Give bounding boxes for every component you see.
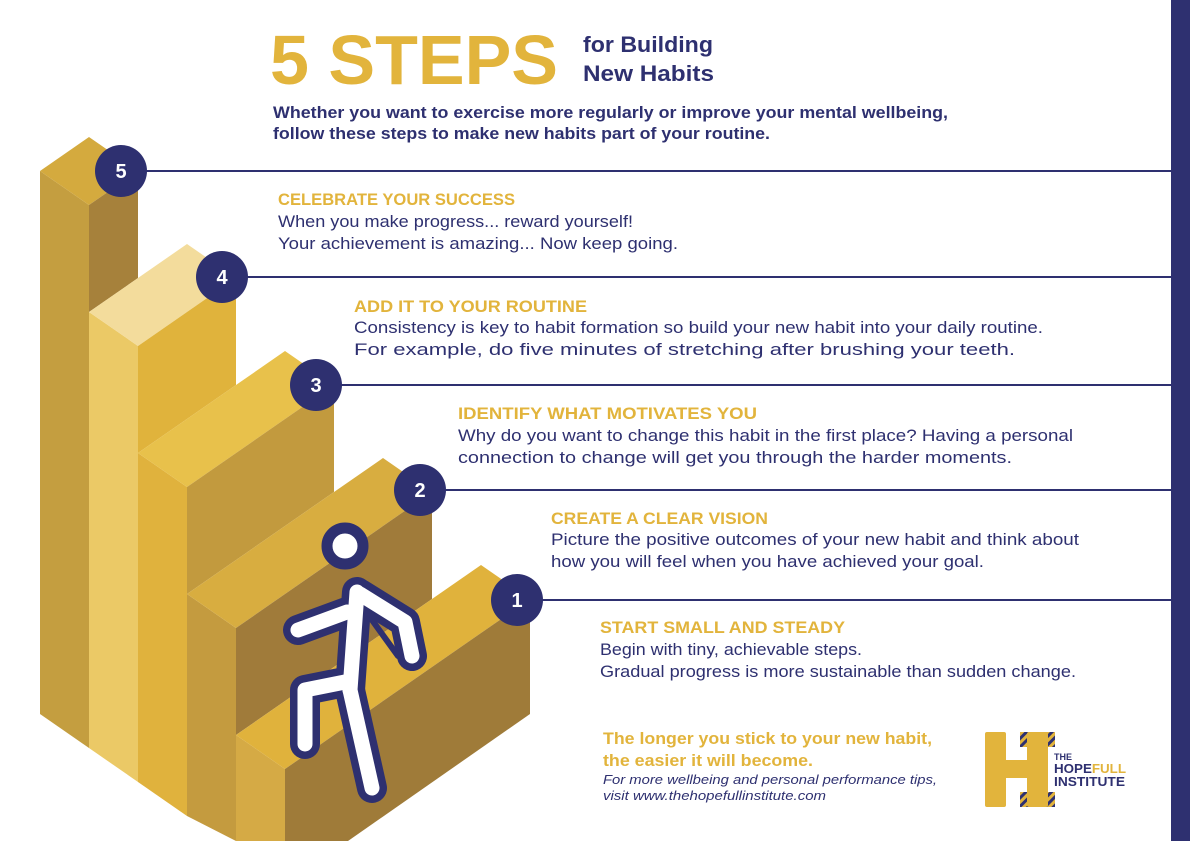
- footer note: The longer you stick to your new habit,: [603, 729, 932, 748]
- step 5 text: [278, 190, 678, 253]
- step 1 text: Begin with tiny, achievable steps.: [600, 640, 862, 659]
- step 1 text: START SMALL AND STEADY: [600, 618, 846, 637]
- step 2 column: [187, 458, 432, 841]
- footer note: visit www.thehopefullinstitute.com: [603, 788, 826, 803]
- step number circles: 1: [511, 590, 523, 612]
- step 2 text: Picture the positive outcomes of your new habit and think about: [551, 530, 1079, 549]
- icon: person climbing: [298, 528, 412, 788]
- step 4 text: [354, 297, 1043, 359]
- connector lines: [121, 171, 1171, 600]
- staircase illustration: [40, 137, 530, 841]
- step 5 column: [40, 137, 138, 748]
- step 1 text: Gradual progress is more sustainable than sudden change.: [600, 662, 1076, 681]
- step 2 text: [551, 509, 1079, 571]
- subtitle: follow these steps to make new habits part of your routine.: [273, 125, 770, 143]
- step 4 text: Consistency is key to habit formation so build your new habit into your daily routine.: [354, 318, 1043, 337]
- subtitle: [273, 104, 948, 143]
- step 5 text: When you make progress... reward yourself!: [278, 212, 633, 231]
- step 3 text: [458, 404, 1073, 467]
- title: for Building: [583, 32, 713, 57]
- step 5 text: CELEBRATE YOUR SUCCESS: [278, 190, 515, 209]
- logo: HOPEFULL: [1054, 762, 1126, 776]
- step 3 text: IDENTIFY WHAT MOTIVATES YOU: [458, 404, 757, 423]
- title: New Habits: [583, 61, 714, 86]
- step 1 column: [236, 565, 530, 841]
- right side bar: [1171, 0, 1190, 841]
- title: 5 STEPS: [270, 21, 558, 99]
- step number circles: [95, 145, 543, 626]
- step 3 column: [138, 351, 334, 816]
- logo: THE: [1054, 752, 1072, 762]
- title: [270, 21, 714, 99]
- step 4 column: [89, 244, 236, 782]
- step 3 text: Why do you want to change this habit in the first place? Having a personal: [458, 426, 1073, 445]
- step 3 text: connection to change will get you through the harder moments.: [458, 448, 1012, 467]
- step 4 text: ADD IT TO YOUR ROUTINE: [354, 297, 587, 316]
- step 2 text: CREATE A CLEAR VISION: [551, 509, 768, 528]
- step 4 text: For example, do five minutes of stretching after brushing your teeth.: [354, 340, 1015, 359]
- step 1 text: [600, 618, 1076, 681]
- logo: INSTITUTE: [1054, 775, 1125, 789]
- step 5 text: Your achievement is amazing... Now keep going.: [278, 234, 678, 253]
- footer note: the easier it will become.: [603, 751, 813, 770]
- step 2 text: how you will feel when you have achieved your goal.: [551, 552, 984, 571]
- subtitle: Whether you want to exercise more regularly or improve your mental wellbeing,: [273, 104, 948, 122]
- step number circles: 2: [414, 480, 426, 502]
- logo: [985, 732, 1126, 807]
- step number circles: 5: [115, 161, 127, 183]
- step number circles: 4: [216, 267, 228, 289]
- footer note: [603, 729, 937, 803]
- step number circles: 3: [310, 375, 322, 397]
- footer note: For more wellbeing and personal performance tips,: [603, 772, 937, 787]
